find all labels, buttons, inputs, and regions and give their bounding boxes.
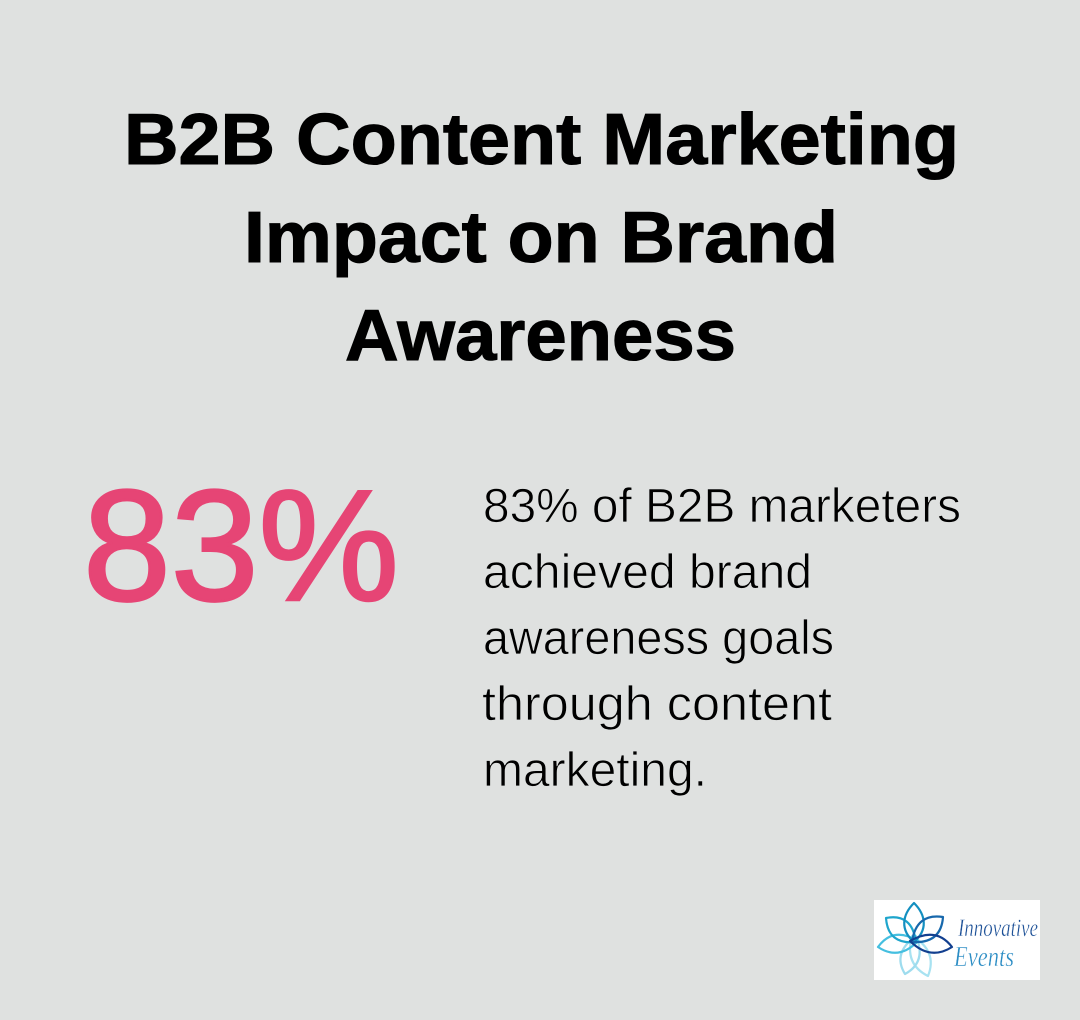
title — [124, 100, 959, 376]
description text: achieved brand — [483, 546, 812, 599]
description text: through content — [482, 678, 832, 731]
description text: marketing. — [483, 744, 707, 797]
title: B2B Content Marketing — [124, 100, 959, 180]
title: Impact on Brand — [244, 198, 838, 278]
big statistic: 83%: 83% — [83, 458, 399, 634]
logo wordmark: Innovative — [957, 915, 1038, 942]
description text — [482, 480, 961, 797]
logo: Innovative Events — [874, 900, 1040, 980]
description text: awareness goals — [483, 612, 834, 665]
title: Awareness — [345, 296, 736, 376]
icon: flower of seven petals — [878, 903, 952, 976]
logo wordmark: Events — [953, 942, 1014, 973]
description text: 83% of B2B marketers — [483, 480, 961, 533]
logo wordmark — [953, 915, 1038, 973]
